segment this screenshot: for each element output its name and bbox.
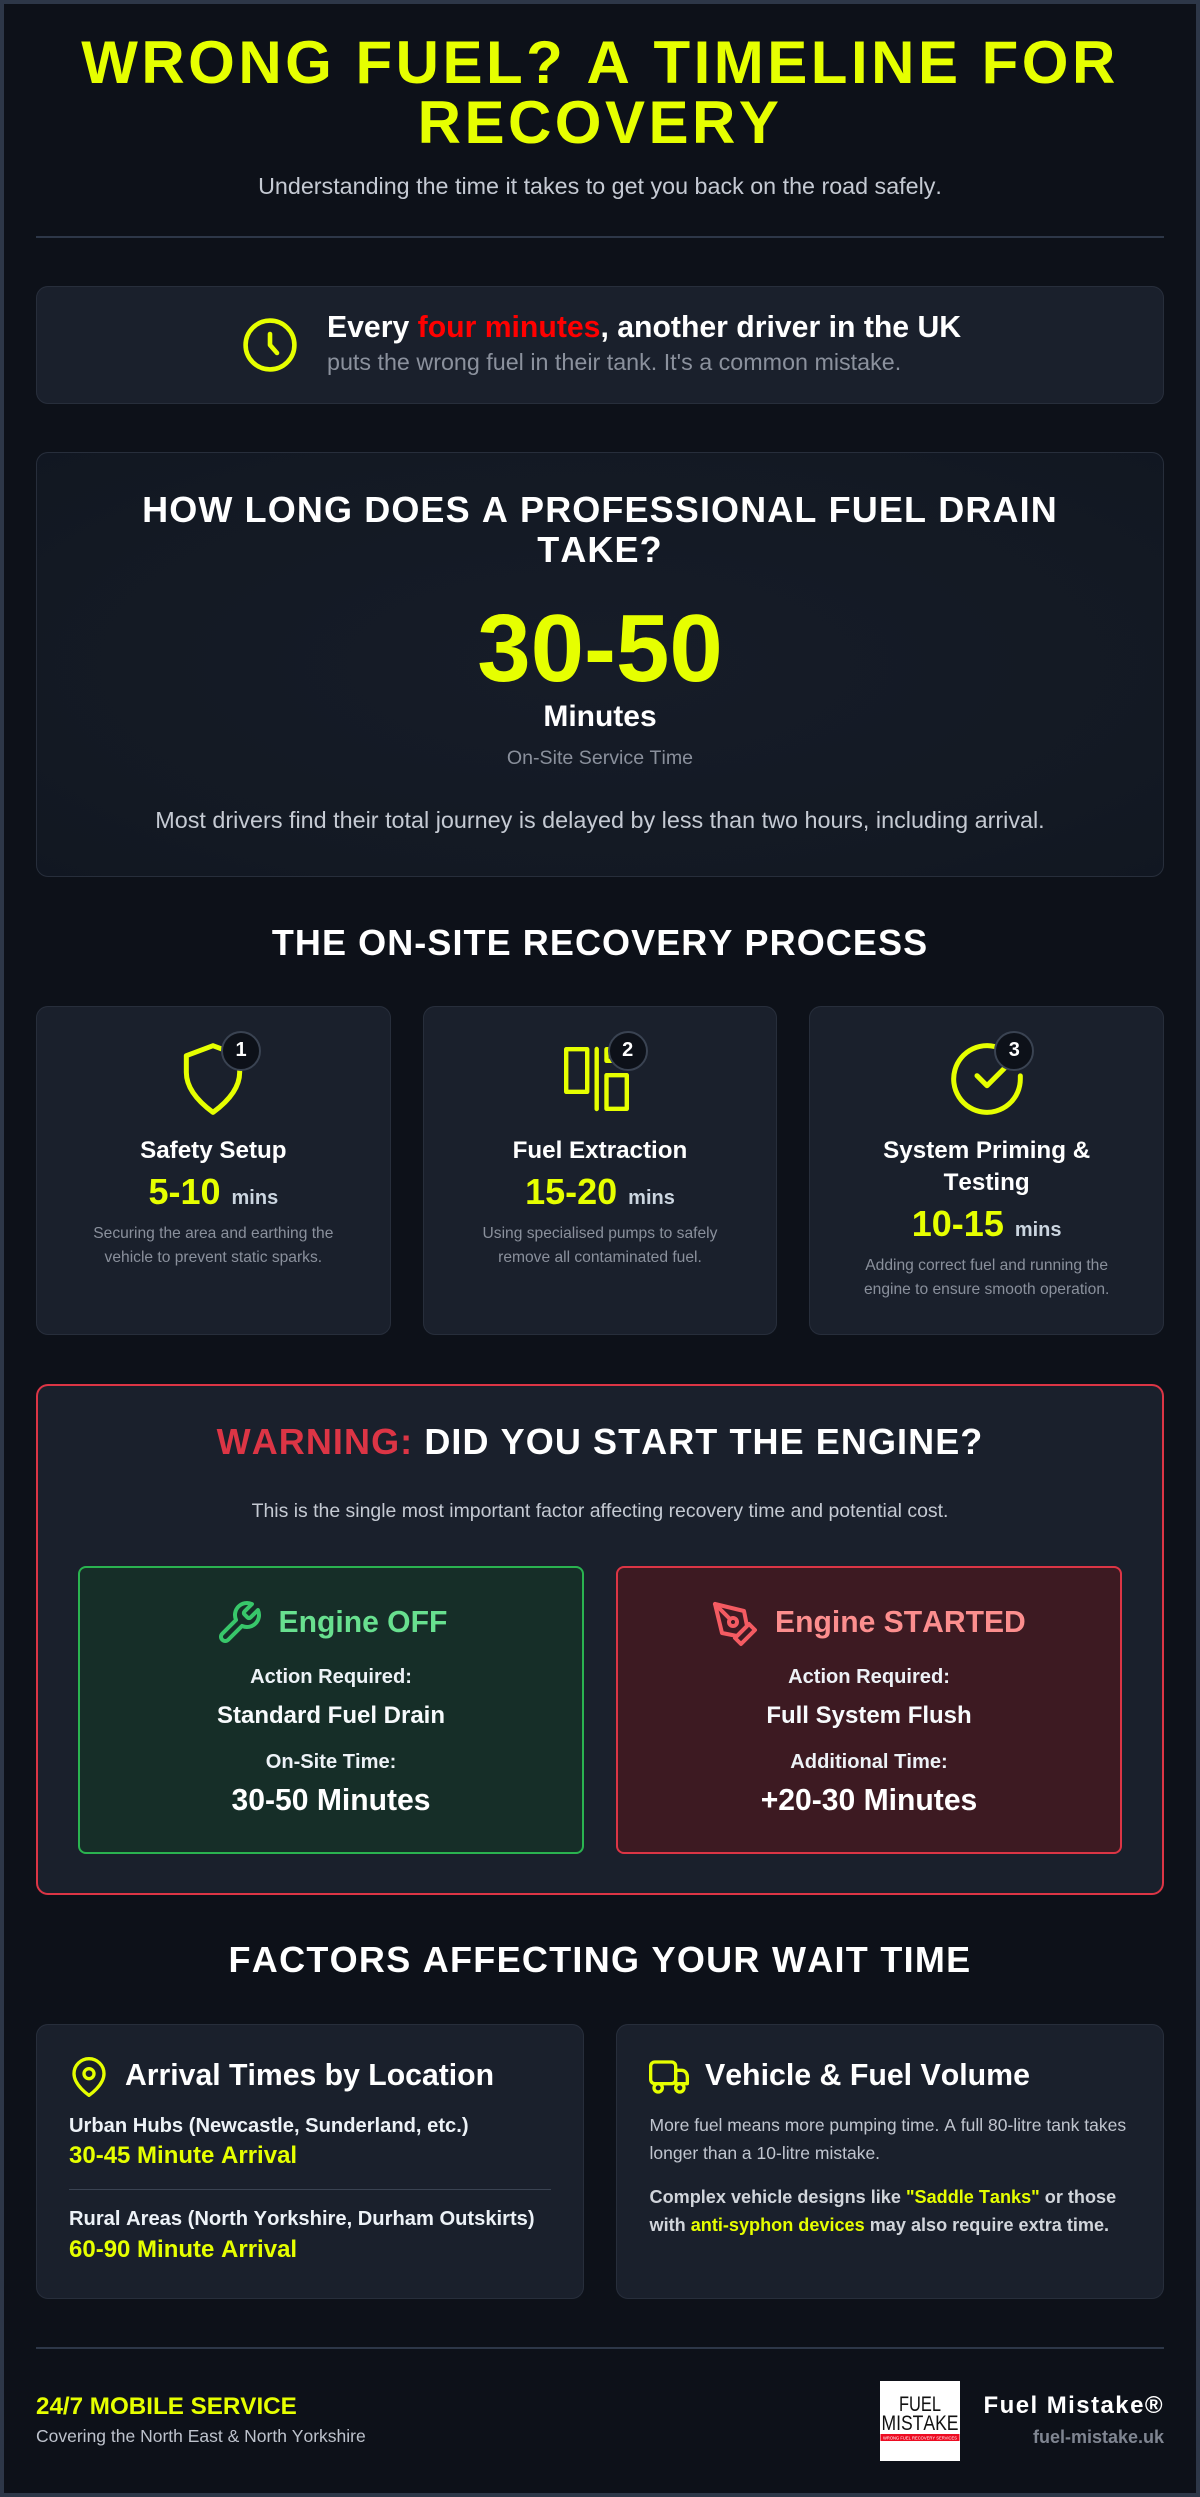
panel: vehicle and fuel volume (616, 2024, 1164, 2299)
summary text: Most drivers find their total journey is delayed by less than two hours, including arrival. (155, 806, 1045, 832)
step time: 5-10 mins (148, 1171, 278, 1212)
title: WRONG FUEL? A TIMELINE FOR (81, 28, 1119, 96)
logo: MISTAKE (882, 2412, 958, 2435)
step title: System Priming & (883, 1136, 1090, 1164)
step time: 10-15 mins (912, 1203, 1062, 1244)
time label: On-Site Time: (266, 1751, 396, 1773)
panel: how long does a fuel drain take (36, 452, 1164, 877)
engine off heading: Engine OFF (278, 1606, 447, 1639)
warning heading: WARNING: DID YOU START THE ENGINE? (217, 1421, 983, 1462)
fuel volume text: longer than a 10-litre mistake. (650, 2143, 880, 2163)
stat headline: Every four minutes, another driver in the UK (327, 311, 961, 344)
warning subtext: This is the single most important factor affecting recovery time and potential cost. (252, 1500, 948, 1522)
time label: Additional Time: (790, 1751, 948, 1773)
step title: Fuel Extraction (513, 1136, 687, 1164)
step number (221, 1031, 261, 1071)
icon: location pin (72, 2057, 106, 2097)
panel heading (142, 488, 1058, 570)
footer (36, 2381, 1164, 2461)
logo: WRONG FUEL RECOVERY SERVICES (883, 2436, 957, 2440)
step number (994, 1031, 1034, 1071)
panel heading: Arrival Times by Location (125, 2059, 494, 2092)
panel: step 1 (36, 1006, 391, 1335)
panel: engine started (616, 1566, 1122, 1854)
action label: Action Required: (250, 1666, 412, 1688)
panel: arrival times (36, 2024, 584, 2299)
service headline: 24/7 MOBILE SERVICE (36, 2393, 297, 2420)
heading: recovery process: THE ON-SITE RECOVERY PROCESS (272, 922, 928, 962)
time value: +20-30 Minutes (761, 1784, 977, 1817)
header (36, 28, 1164, 238)
step description: vehicle to prevent static sparks. (105, 1249, 322, 1266)
action value: Full System Flush (766, 1702, 972, 1729)
icon: check circle (951, 1043, 1023, 1115)
panel: engine off (78, 1566, 584, 1854)
icon: truck (649, 2060, 689, 2094)
panel heading: TAKE? (537, 528, 663, 570)
rural label: Rural Areas (North Yorkshire, Durham Outskirts) (69, 2208, 535, 2230)
brand name: Fuel Mistake® (984, 2392, 1164, 2419)
icon: extraction columns (564, 1046, 629, 1112)
action value: Standard Fuel Drain (217, 1702, 445, 1729)
engine started heading: Engine STARTED (775, 1606, 1026, 1639)
step title: Testing (944, 1168, 1030, 1196)
icon: wrench (219, 1601, 261, 1643)
on-site label: On-Site Service Time (507, 747, 693, 769)
step title: Safety Setup (140, 1136, 287, 1164)
logo (880, 2381, 960, 2461)
urban label: Urban Hubs (Newcastle, Sunderland, etc.) (69, 2115, 469, 2137)
action label: Action Required: (788, 1666, 950, 1688)
fuel volume text: More fuel means more pumping time. A full 80-litre tank takes (650, 2115, 1126, 2135)
stat subtext: puts the wrong fuel in their tank. It's a common mistake. (327, 349, 901, 375)
step description: Adding correct fuel and running the (865, 1257, 1108, 1274)
time value: 30-50 Minutes (231, 1784, 431, 1817)
panel: four minutes stat (36, 286, 1164, 404)
step number: 2 (622, 1039, 633, 1061)
step title (883, 1136, 1090, 1196)
subtitle: Understanding the time it takes to get you back on the road safely. (258, 173, 942, 199)
big number: 30-50 (477, 594, 723, 702)
website: fuel-mistake.uk (1033, 2427, 1164, 2447)
panel: step 3 (809, 1006, 1164, 1335)
fuel volume text (650, 2115, 1126, 2163)
panel heading: Vehicle & Fuel Volume (705, 2059, 1030, 2092)
panel: engine warning (36, 1384, 1164, 1895)
panel heading: HOW LONG DOES A PROFESSIONAL FUEL DRAIN (142, 488, 1058, 530)
urban arrival: 30-45 Minute Arrival (69, 2142, 297, 2169)
logo: FUEL (899, 2393, 941, 2416)
heading: wait time factors: FACTORS AFFECTING YOUR WAIT TIME (229, 1939, 971, 1980)
step number: 1 (235, 1039, 247, 1061)
step description (483, 1225, 718, 1266)
step number (608, 1031, 648, 1071)
title: RECOVERY (418, 88, 782, 156)
icon: pen nib (712, 1602, 758, 1646)
step time: 15-20 mins (525, 1171, 675, 1212)
minutes label: Minutes (543, 700, 657, 733)
rural arrival: 60-90 Minute Arrival (69, 2236, 297, 2262)
title (81, 28, 1119, 156)
step description (93, 1225, 333, 1266)
icon: shield (184, 1043, 242, 1115)
vehicle design text: with anti-syphon devices may also require extra time. (650, 2215, 1109, 2235)
vehicle design text (650, 2187, 1116, 2235)
panel: step 2 (423, 1006, 777, 1335)
icon: clock (243, 318, 297, 372)
step description: Securing the area and earthing the (93, 1225, 333, 1242)
step description: remove all contaminated fuel. (498, 1249, 702, 1266)
step description (864, 1257, 1109, 1298)
step description: engine to ensure smooth operation. (864, 1281, 1109, 1298)
vehicle design text: Complex vehicle designs like "Saddle Tanks" or those (650, 2187, 1116, 2207)
coverage text: Covering the North East & North Yorkshire (36, 2426, 366, 2446)
step description: Using specialised pumps to safely (483, 1225, 717, 1242)
step number: 3 (1009, 1039, 1020, 1061)
